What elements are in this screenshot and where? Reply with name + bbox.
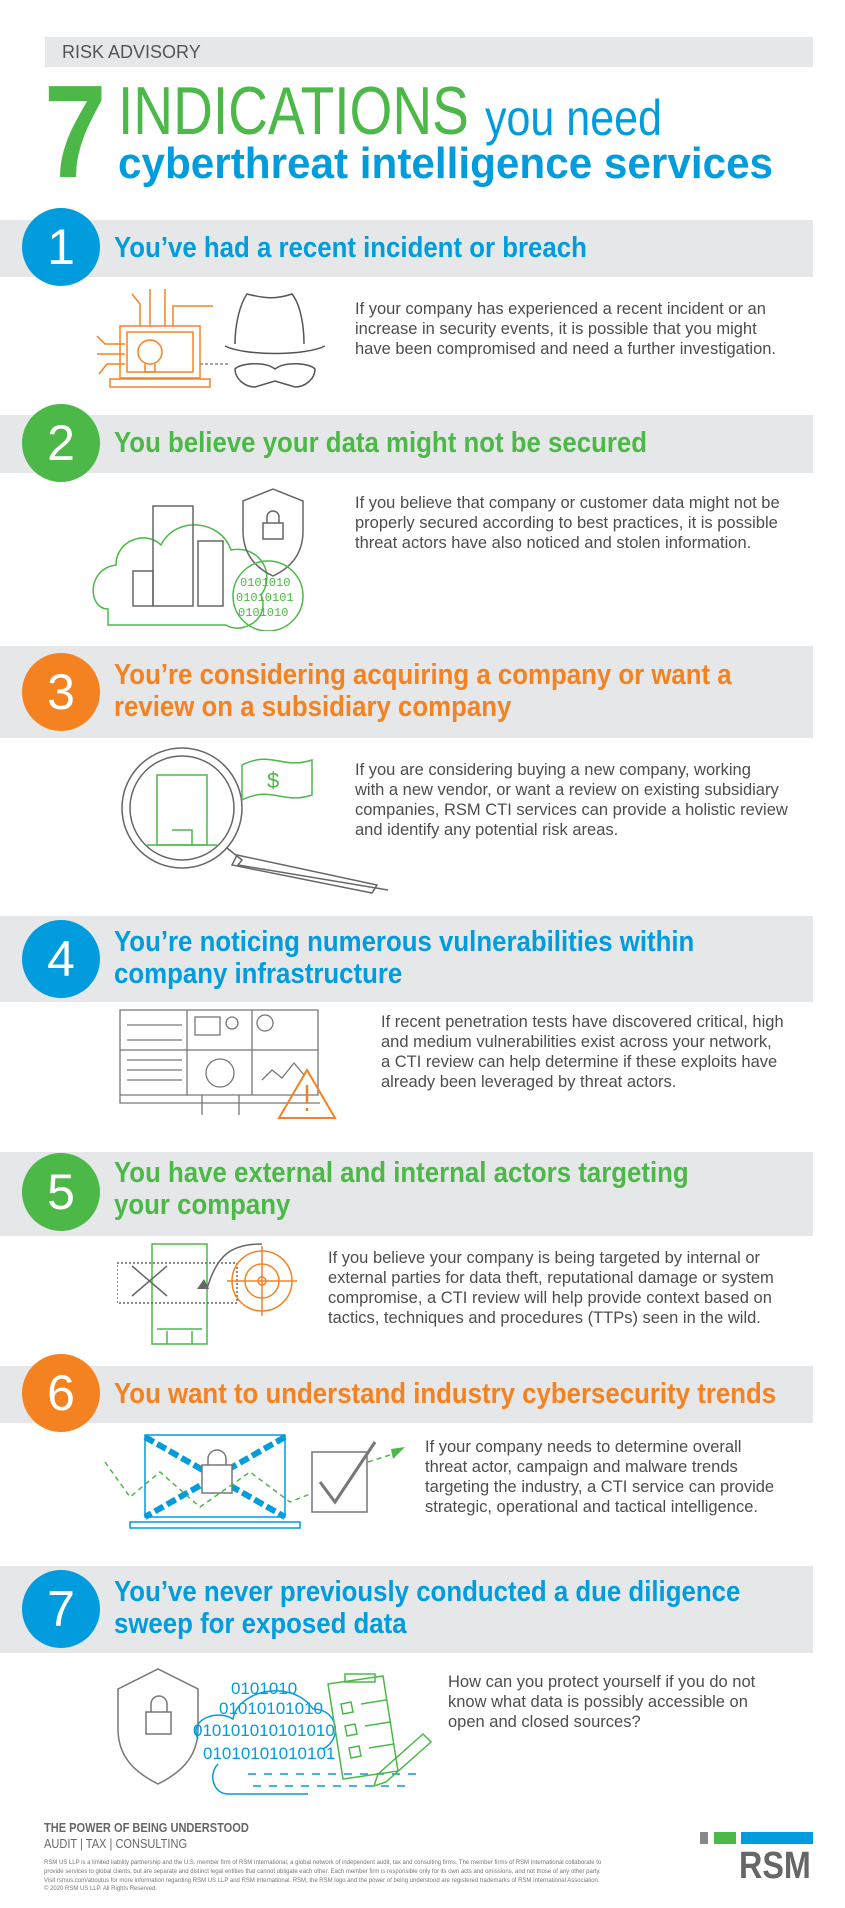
RSM logo: RSM (739, 1845, 811, 1887)
icon: shield cloud clipboard: 01010101010 (219, 1699, 323, 1718)
heading 3: review on a subsidiary company (114, 691, 511, 723)
text 4 (381, 1013, 784, 1091)
footer tagline (44, 1820, 249, 1851)
circle 4 (22, 920, 100, 998)
title: cyberthreat intelligence services (118, 139, 773, 188)
heading 5 (114, 1157, 689, 1221)
text 3: and identify any potential risk areas. (355, 821, 618, 839)
heading 4: company infrastructure (114, 958, 402, 990)
circle 2 (22, 404, 100, 482)
title (44, 58, 773, 205)
heading 6: You want to understand industry cybersecurity trends (114, 1378, 776, 1410)
section 2 band (0, 415, 813, 473)
section 3 band (0, 646, 813, 738)
circle 1 (22, 208, 100, 286)
heading 3 (114, 659, 732, 723)
icon: cloud building shield: 0101010 (240, 576, 290, 590)
RSM logo (700, 1832, 813, 1887)
text 1 (355, 300, 776, 358)
icon: shield cloud clipboard: 010101010101010 (193, 1721, 335, 1740)
text 5: external parties for data theft, reputational damage or system (328, 1269, 774, 1287)
heading 7: You’ve never previously conducted a due diligence (114, 1576, 740, 1608)
heading 7 (114, 1576, 740, 1640)
heading 1: You’ve had a recent incident or breach (114, 232, 587, 264)
footer legal text: Visit rsmus.com/aboutus for more information regarding RSM US LLP and RSM International. RSM, the RSM logo and the power of being understood are registered trademarks of RSM International Association. (44, 1877, 600, 1884)
icon: cloud building shield: 0101010 (238, 606, 288, 620)
text 3: with a new vendor, or want a review on existing subsidiary (355, 781, 779, 799)
heading 5: your company (114, 1189, 290, 1221)
heading 2: You believe your data might not be secured (114, 427, 647, 459)
circle 5: 5 (47, 1164, 75, 1220)
heading 5: You have external and internal actors targeting (114, 1157, 689, 1189)
icon: shield cloud clipboard: 0101010 (231, 1679, 297, 1698)
icon: chained laptop check (104, 1434, 405, 1529)
footer tagline: THE POWER OF BEING UNDERSTOOD (44, 1820, 249, 1835)
text 2: threat actors have also noticed and stolen information. (355, 534, 751, 552)
footer legal text: © 2020 RSM US LLP. All Rights Reserved. (44, 1885, 157, 1892)
text 7: How can you protect yourself if you do not (448, 1673, 755, 1691)
heading 7: sweep for exposed data (114, 1608, 407, 1640)
text 7: know what data is possibly accessible on (448, 1693, 748, 1711)
text 2: properly secured according to best practices, it is possible (355, 514, 778, 532)
circle 3: 3 (47, 664, 75, 720)
text 5: If you believe your company is being targeted by internal or (328, 1249, 760, 1267)
heading 4 (114, 926, 694, 990)
icon: shield cloud clipboard (117, 1668, 432, 1795)
icon: shield cloud clipboard: 01010101010101 (203, 1744, 335, 1763)
icon: cloud building shield: 01010101 (236, 591, 294, 605)
text 7: open and closed sources? (448, 1713, 641, 1731)
icon: monitors warning (119, 1009, 337, 1119)
section 6 band (0, 1366, 813, 1423)
text 1: have been compromised and need a further investigation. (355, 340, 776, 358)
circle 7 (22, 1570, 100, 1648)
text 6: threat actor, campaign and malware trends (425, 1458, 738, 1476)
footer legal text: provide services to global clients, but are separate and distinct legal entities that cannot obligate each other. Each member firm is responsible only for its own acts and omissions, and not those of any other party. (44, 1868, 601, 1875)
circle 6 (22, 1354, 100, 1432)
icon: building target (117, 1243, 297, 1345)
text 5: compromise, a CTI review will help provide context based on (328, 1289, 772, 1307)
circle 3 (22, 653, 100, 731)
heading 3: You’re considering acquiring a company or want a (114, 659, 732, 691)
text 5 (328, 1249, 774, 1327)
text 5: tactics, techniques and procedures (TTPs) seen in the wild. (328, 1309, 761, 1327)
circle 5 (22, 1153, 100, 1231)
title: INDICATIONS (118, 73, 469, 149)
text 6: targeting the industry, a CTI service can provide (425, 1478, 774, 1496)
text 4: already been leveraged by threat actors. (381, 1073, 676, 1091)
text 7 (448, 1673, 756, 1731)
circle 4: 4 (47, 931, 75, 987)
header band: RISK ADVISORY (62, 42, 201, 62)
text 1: If your company has experienced a recent incident or an (355, 300, 766, 318)
text 3: If you are considering buying a new company, working (355, 761, 751, 779)
icon: magnifier building money: $ (267, 768, 279, 793)
text 4: and medium vulnerabilities exist across your network, (381, 1033, 772, 1051)
text 4: If recent penetration tests have discovered critical, high (381, 1013, 784, 1031)
section 4 band (0, 916, 813, 1002)
circle 6: 6 (47, 1365, 75, 1421)
footer tagline: AUDIT | TAX | CONSULTING (44, 1836, 187, 1851)
text 1: increase in security events, it is possible that you might (355, 320, 757, 338)
text 6: If your company needs to determine overall (425, 1438, 741, 1456)
text 6: strategic, operational and tactical intelligence. (425, 1498, 758, 1516)
heading 4: You’re noticing numerous vulnerabilities within (114, 926, 694, 958)
section 7 band (0, 1566, 813, 1653)
title: you need (485, 90, 662, 146)
text 3: companies, RSM CTI services can provide a holistic review (355, 801, 788, 819)
icon: hacker laptop (96, 289, 326, 388)
footer legal text: RSM US LLP is a limited liability partnership and the U.S. member firm of RSM International, a global network of independent audit, tax and consulting firms. The member firms of RSM International collaborate to (44, 1859, 601, 1866)
icon: magnifier building money (121, 747, 388, 894)
circle 1: 1 (47, 219, 75, 275)
text 4: a CTI review can help determine if these exploits have (381, 1053, 777, 1071)
icon: cloud building shield (92, 488, 304, 631)
title: 7 (44, 58, 106, 205)
header band (45, 37, 813, 67)
section 5 band (0, 1152, 813, 1236)
text 3 (355, 761, 788, 839)
footer legal text (44, 1859, 601, 1892)
text 2 (355, 494, 780, 552)
text 6 (425, 1438, 774, 1516)
text 2: If you believe that company or customer data might not be (355, 494, 780, 512)
circle 2: 2 (47, 415, 75, 471)
section 1 band (0, 220, 813, 277)
circle 7: 7 (47, 1581, 75, 1637)
